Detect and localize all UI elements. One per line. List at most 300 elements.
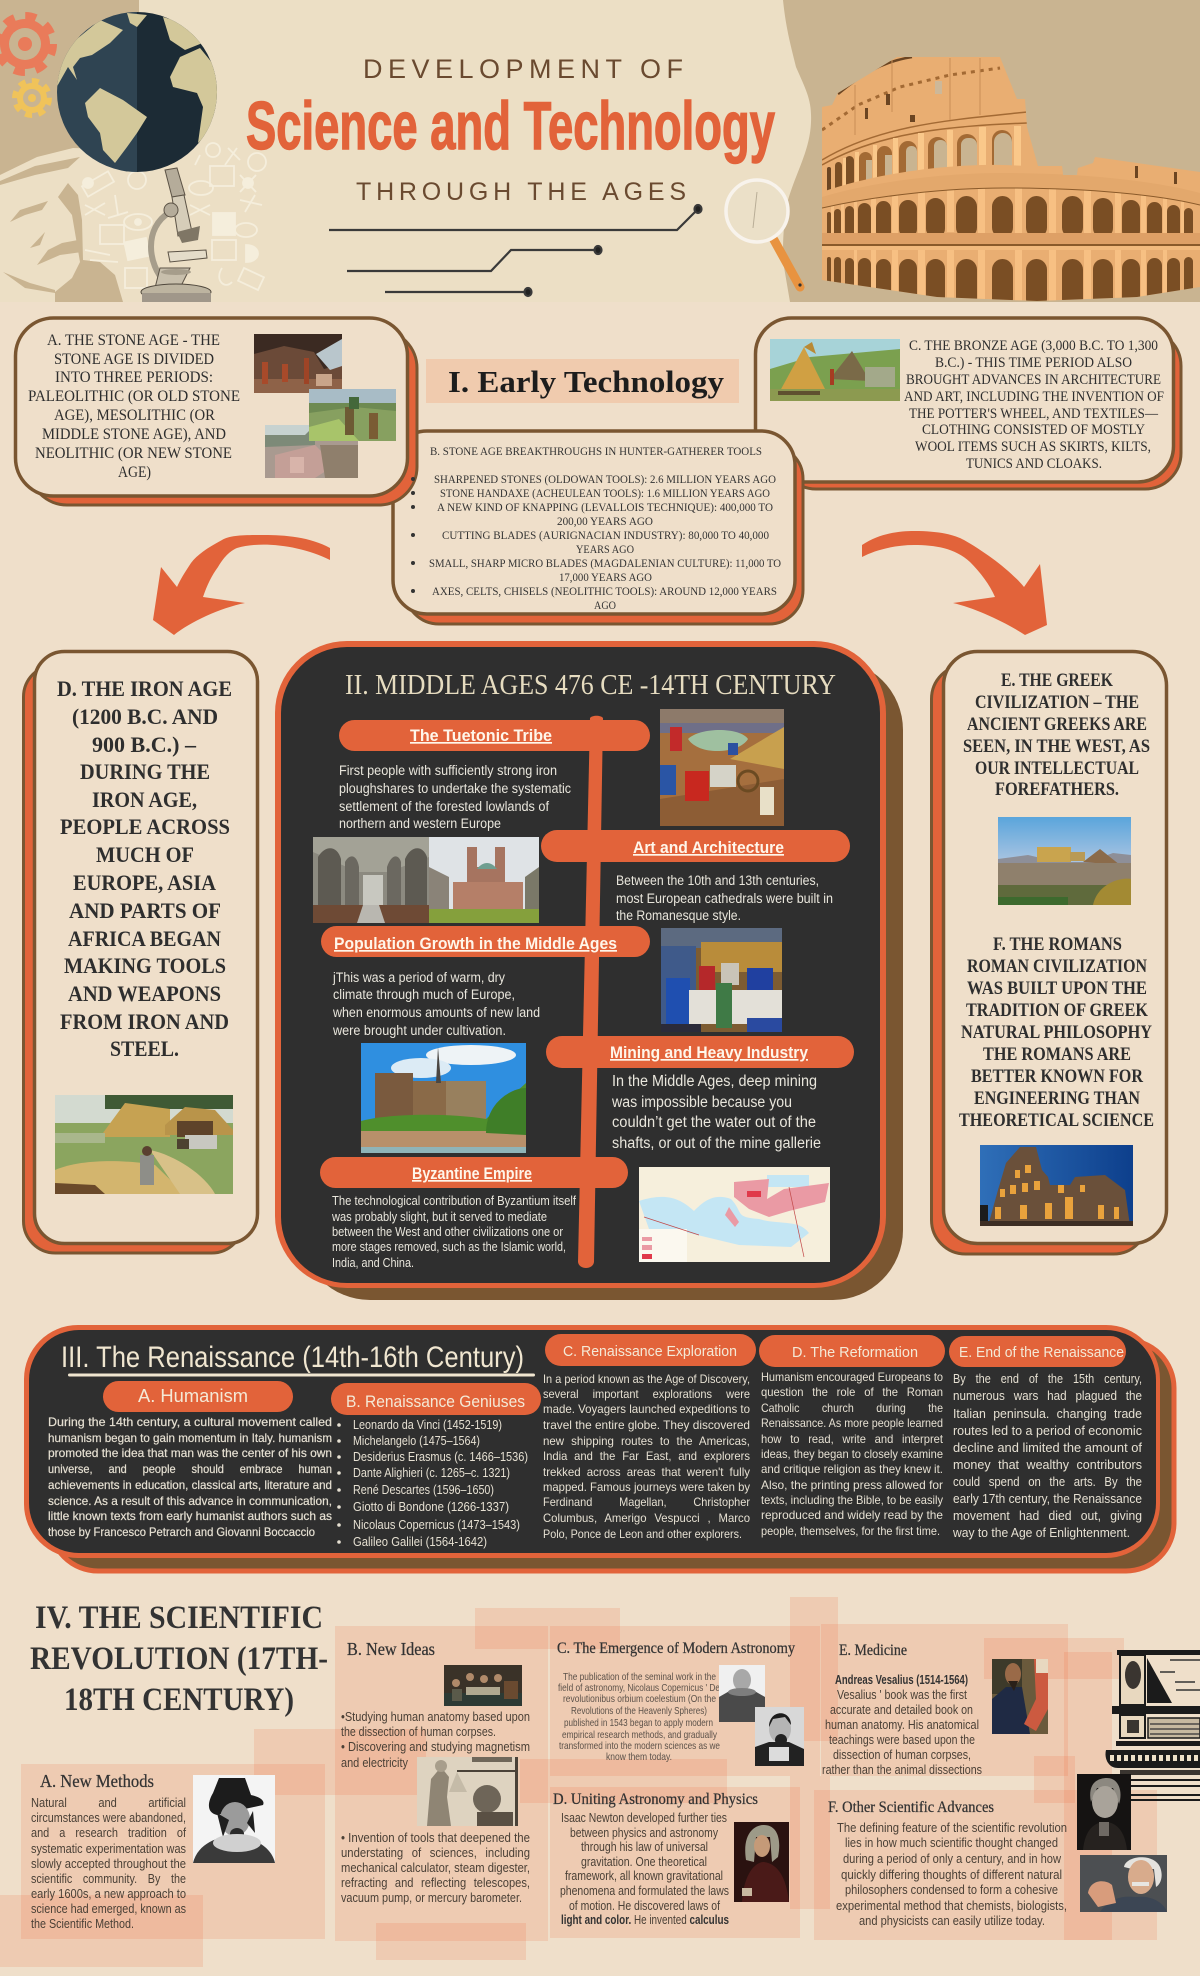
panel B text: 17,000 YEARS AGO — [559, 572, 652, 584]
panel B text: AXES, CELTS, CHISELS (NEOLITHIC TOOLS): AROUND 12,000 YEARS — [432, 586, 777, 598]
text: the reformation: Catholic church during the — [761, 1401, 943, 1415]
panel B text: CUTTING BLADES (AURIGNACIAN INDUSTRY): 80,000 TO 40,000 — [442, 530, 769, 542]
section heading: I. Early Technology — [426, 359, 739, 403]
panel B: stone age breakthroughs box — [393, 431, 803, 624]
text: modern astronomy: published in 1543 began to apply modern — [564, 1717, 713, 1729]
text: medicine: dissection of human corpses, — [833, 1748, 971, 1762]
text: end of the renaissance: decline and limited the amount of — [953, 1441, 1143, 1455]
panel D text — [57, 676, 232, 1061]
text: renaissance exploration: In a period known as the Age of Discovery, — [543, 1372, 750, 1386]
panel C text: TUNICS AND CLOAKS. — [966, 456, 1102, 472]
text: other scientific advances: and physicists can easily utilize today. — [859, 1914, 1045, 1928]
list: renaissance geniuses: Nicolaus Copernicus (1473–1543) — [353, 1518, 520, 1532]
panel F text: F. THE ROMANS — [993, 934, 1122, 955]
panel E text — [963, 670, 1150, 800]
science icons collage — [82, 143, 266, 290]
text: modern astronomy: revolutionibus orbium coelestium (On the — [563, 1693, 716, 1705]
image: iron age village — [55, 1095, 233, 1194]
image: vesalius portrait — [992, 1659, 1048, 1734]
panel F text: TRADITION OF GREEK — [966, 1000, 1148, 1021]
text: uniting astronomy: light and color. He invented calculus — [561, 1913, 729, 1927]
colosseum wall under top arches — [827, 164, 1021, 196]
title: through the ages: THROUGH THE AGES — [356, 178, 686, 206]
text: mining and heavy industry — [611, 1073, 821, 1152]
text: new ideas first bullets: •Studying human anatomy based upon — [341, 1710, 530, 1724]
panel B shadow — [405, 445, 803, 624]
globe — [55, 10, 222, 175]
pill: art and architecture: Art and Architecture — [633, 838, 784, 857]
image: cave dwellers — [254, 334, 342, 393]
pill: renaissance geniuses: B. Renaissance Geniuses — [346, 1392, 525, 1411]
text: tuetonic tribe: northern and western Europe — [339, 816, 501, 831]
panel A text — [28, 332, 240, 481]
image: bronze age village — [770, 339, 900, 401]
colosseum top pillars — [843, 126, 1021, 186]
panel C text: THE POTTER'S WHEEL, AND TEXTILES— — [909, 406, 1158, 422]
text: uniting astronomy: gravitation. One theoretical — [581, 1855, 707, 1869]
panel F text: ENGINEERING THAN — [974, 1088, 1140, 1109]
section heading: IV. The Scientific Revolution: REVOLUTION (17TH- — [30, 1641, 328, 1677]
image: acropolis — [998, 817, 1131, 905]
pill: renaissance exploration: C. Renaissance Exploration — [563, 1343, 737, 1360]
text: other scientific advances — [836, 1821, 1067, 1928]
text: byzantine empire: was probably slight, but it served to mediate — [331, 1210, 547, 1224]
panel D text: D. THE IRON AGE — [57, 676, 232, 701]
text: the reformation: Also, the printing press allowed for — [761, 1478, 943, 1492]
text: population growth: jThis was a period of warm, dry — [332, 970, 505, 985]
text: renaissance exploration: Ferdinand Magellan, Christopher — [543, 1495, 750, 1509]
image: medieval farmers — [660, 709, 784, 826]
panel D: iron age — [24, 652, 258, 1253]
panel A body — [16, 318, 408, 496]
block A: new methods — [31, 1771, 275, 1931]
text: renaissance exploration: mapped. Famous journeys were taken by — [543, 1480, 750, 1494]
text: population growth: were brought under cultivation. — [332, 1023, 506, 1038]
panel A text: A. THE STONE AGE - THE — [47, 332, 220, 349]
text: new ideas invention bullet: • Invention of tools that deepened the — [341, 1831, 530, 1845]
text: byzantine empire: India, and China. — [332, 1256, 414, 1270]
heading: new methods: A. New Methods — [40, 1771, 154, 1791]
text: uniting astronomy: through his law of universal — [581, 1840, 708, 1854]
text: the reformation: Humanism encouraged Europeans to — [761, 1370, 943, 1384]
panel C text: CLOTHING CONSISTED OF MOSTLY — [922, 422, 1145, 438]
text: tuetonic tribe: First people with sufficiently strong iron — [339, 763, 557, 778]
text: tuetonic tribe: ploughshares to undertake the systematic — [339, 781, 571, 796]
text: humanism — [48, 1415, 332, 1539]
text: new methods: slowly accepted throughout the — [31, 1857, 186, 1871]
text: modern astronomy — [558, 1671, 720, 1763]
text: uniting astronomy: of motion. He discovered laws of — [569, 1899, 720, 1913]
panel F text: NATURAL PHILOSOPHY — [961, 1022, 1152, 1043]
text: new ideas first bullets: and electricity — [341, 1756, 409, 1770]
text: end of the renaissance: way to the Age of Enlightenment. — [952, 1526, 1130, 1540]
left tan shape — [0, 0, 139, 175]
pill: the reformation: D. The Reformation — [792, 1344, 918, 1361]
text: new ideas invention bullet: mechanical calculator, steam digester, — [341, 1861, 530, 1875]
text: humanism: promoted the idea that man was the center of his own — [48, 1446, 332, 1460]
panel C shadow — [780, 330, 1181, 489]
colosseum illustration — [815, 50, 1200, 310]
pill: the tuetonic tribe — [339, 720, 650, 751]
heading: medicine: E. Medicine — [839, 1642, 907, 1659]
image: neolithic settlers — [265, 425, 358, 478]
text: new methods: circumstances were abandoned, — [31, 1811, 186, 1825]
panel A text: PALEOLITHIC (OR OLD STONE — [28, 388, 240, 405]
text: medicine: Andreas Vesalius (1514-1564) — [835, 1673, 968, 1687]
heading: modern astronomy: C. The Emergence of Modern Astronomy — [557, 1640, 795, 1657]
heading: new ideas: B. New Ideas — [347, 1639, 435, 1659]
text: population growth: climate through much of Europe, — [333, 987, 515, 1002]
panel F text — [959, 934, 1154, 1131]
panel E text: CIVILIZATION – THE — [975, 692, 1139, 713]
panel C body — [756, 318, 1174, 482]
text: byzantine empire: more stages removed, such as the Islamic world, — [332, 1240, 566, 1254]
pill: renaissance exploration — [545, 1334, 756, 1366]
block B: new ideas — [341, 1639, 530, 1905]
colosseum top arches — [827, 130, 1012, 190]
text: end of the renaissance: could spend on the arts. By the — [953, 1475, 1142, 1489]
panel B text — [411, 446, 781, 612]
text: renaissance exploration: trekked across areas that weren't fully — [543, 1465, 750, 1479]
text: end of the renaissance: routes led to a period of economic — [953, 1424, 1142, 1438]
block D: uniting astronomy and physics — [553, 1791, 789, 1927]
panel B text: A NEW KIND OF KNAPPING (LEVALLOIS TECHNIQUE): 400,000 TO — [437, 502, 773, 514]
panel A text: NEOLITHIC (OR NEW STONE — [35, 445, 232, 462]
text: tuetonic tribe: settlement of the forested lowlands of — [339, 799, 549, 814]
image: gothic cathedral interior — [313, 837, 429, 923]
text: renaissance exploration: travel the entire globe. They discovered — [543, 1418, 750, 1432]
panel E/F body — [944, 652, 1166, 1244]
image: kepler portrait — [755, 1707, 804, 1766]
text: the reformation — [761, 1370, 944, 1538]
panel E text: FOREFATHERS. — [995, 779, 1119, 800]
panel III body — [29, 1330, 1156, 1553]
text: new methods: science had emerged, known as — [31, 1902, 186, 1916]
panel A shadow — [29, 330, 417, 505]
panel F text: THE ROMANS ARE — [983, 1044, 1131, 1065]
text: end of the renaissance: movement had died out, giving — [953, 1509, 1142, 1523]
colosseum lower cornice — [815, 233, 1200, 244]
pill: renaissance geniuses — [331, 1383, 541, 1415]
text: new ideas first bullets: the dissection of human corpses. — [341, 1725, 496, 1739]
panel D text: EUROPE, ASIA — [73, 870, 216, 895]
panel D text: (1200 B.C. AND — [72, 704, 218, 729]
colosseum middle pillars — [831, 188, 1184, 233]
heading: uniting astronomy: D. Uniting Astronomy and Physics — [553, 1791, 758, 1808]
text: end of the renaissance: By the end of the 15th century, — [953, 1372, 1142, 1386]
panel D text: AND WEAPONS — [68, 981, 221, 1006]
right tan wave — [783, 0, 1200, 302]
block C: emergence of modern astronomy — [557, 1640, 804, 1766]
text: end of the renaissance: numerous wars had plagued the — [953, 1389, 1142, 1403]
text: medicine: rather than the animal dissections — [822, 1763, 982, 1777]
translucent panels of section IV — [0, 1597, 1157, 1967]
image: medieval banquet — [661, 928, 782, 1032]
list: renaissance geniuses: Dante Alighieri (c. 1265–c. 1321) — [353, 1466, 510, 1480]
panel B text: 200,00 YEARS AGO — [557, 516, 653, 528]
text: medicine: human anatomy. His anatomical — [825, 1718, 979, 1732]
image: anatomy lesson — [444, 1665, 522, 1706]
text: uniting astronomy — [560, 1811, 729, 1927]
colosseum upper ring details — [822, 57, 1027, 165]
text: uniting astronomy: between physics and astronomy — [570, 1826, 719, 1840]
text: renaissance exploration: Polo, Ponce de Leon and other explorers. — [543, 1527, 742, 1541]
text: humanism: those by Francesco Petrarch and Giovanni Boccaccio — [48, 1525, 315, 1539]
section heading: IV. The Scientific Revolution — [30, 1600, 328, 1718]
text: modern astronomy: The publication of the seminal work in the — [563, 1671, 716, 1683]
image: tycho brahe portrait — [719, 1665, 765, 1722]
yellow gear — [15, 81, 49, 115]
image: romanesque cathedral — [429, 837, 539, 923]
text: modern astronomy: field of astronomy, Nicolaus Copernicus ' De — [558, 1682, 720, 1694]
pill: the tuetonic tribe: The Tuetonic Tribe — [410, 726, 552, 745]
pill: byzantine empire — [320, 1157, 628, 1188]
panel D text: 900 B.C.) – — [92, 732, 197, 757]
heading: other scientific advances: F. Other Scientific Advances — [828, 1799, 994, 1816]
colosseum mid ring — [831, 188, 1184, 206]
panel B text: SMALL, SHARP MICRO BLADES (MAGDALENIAN CULTURE): 11,000 TO — [429, 558, 781, 570]
section heading: I. Early Technology: I. Early Technology — [448, 364, 725, 399]
panel III shadow — [50, 1340, 1174, 1571]
text: art and architecture: Between the 10th and 13th centuries, — [616, 873, 819, 888]
panel C text: WOOL ITEMS SUCH AS SKIRTS, KILTS, — [915, 439, 1151, 455]
image: experiment engraving — [417, 1757, 518, 1826]
title: development of: DEVELOPMENT OF — [363, 54, 683, 84]
arrow: left curved — [153, 535, 330, 635]
text: art and architecture: most European cathedrals were built in — [616, 891, 833, 906]
list: renaissance geniuses — [337, 1418, 528, 1549]
image: isaac newton portrait — [734, 1822, 789, 1902]
connector lines — [329, 205, 702, 296]
text: new methods — [31, 1796, 186, 1931]
text: end of the renaissance: early 17th century, the Renaissance — [953, 1492, 1142, 1506]
pill: end of the renaissance — [949, 1336, 1126, 1367]
panel B text: SHARPENED STONES (OLDOWAN TOOLS): 2.6 MILLION YEARS AGO — [434, 474, 776, 486]
list: renaissance geniuses: Galileo Galilei (1564-1642) — [353, 1535, 487, 1549]
text: population growth — [332, 970, 540, 1038]
list: renaissance geniuses: Leonardo da Vinci (1452-1519) — [353, 1418, 502, 1432]
panel II border — [275, 641, 886, 1288]
text: renaissance exploration: Columbus, Amerigo Vespucci , Marco — [543, 1511, 750, 1525]
pill: humanism — [103, 1381, 293, 1412]
panel II: middle ages — [275, 641, 903, 1300]
pill: mining and heavy industry — [546, 1036, 854, 1068]
text: the reformation: how to read, write and interpret — [761, 1432, 944, 1446]
text: medicine: teachings were based upon the — [829, 1733, 975, 1747]
panel C text: AND ART, INCLUDING THE INVENTION OF — [904, 389, 1164, 405]
engraving: classical column capital — [1106, 1650, 1200, 1800]
panel F text: WAS BUILT UPON THE — [967, 978, 1147, 999]
text: other scientific advances: during a period of only a century, and in how — [843, 1852, 1062, 1866]
panel C text — [904, 338, 1164, 472]
panel D text: AND PARTS OF — [69, 898, 221, 923]
text: other scientific advances: experimental method that chemists, biologists, — [836, 1899, 1067, 1913]
panel A text: AGE), MESOLITHIC (OR — [54, 407, 216, 424]
pill: population growth — [321, 926, 650, 957]
text: byzantine empire — [331, 1194, 576, 1270]
text: new ideas first bullets — [341, 1710, 530, 1770]
text: new ideas invention bullet: understating of sciences, including — [341, 1846, 530, 1860]
silhouette of thinker head — [0, 157, 123, 302]
text: end of the renaissance: money that wealthy contributors — [953, 1458, 1142, 1472]
text: the reformation: texts, including the Bible, to be easily — [761, 1493, 943, 1507]
panel D shadow — [24, 665, 244, 1253]
text: new ideas invention bullet: refracting and reflecting telescopes, — [341, 1876, 530, 1890]
text: art and architecture — [616, 873, 833, 923]
heading underline — [68, 1374, 535, 1376]
text: new methods: scientific community. By the — [31, 1872, 186, 1886]
text: the reformation: ideas, they began to closely examine — [761, 1447, 943, 1461]
section heading: IV. The Scientific Revolution: 18TH CENTURY) — [64, 1682, 294, 1718]
text: mining and heavy industry: In the Middle Ages, deep mining — [612, 1073, 817, 1090]
text: other scientific advances: quickly differing thoughts of different natural — [841, 1868, 1062, 1882]
text: new ideas invention bullet: vacuum pump, or mercury barometer. — [341, 1891, 522, 1905]
text: new methods: Natural and artificial — [31, 1796, 186, 1810]
text: uniting astronomy: framework, all known gravitational — [565, 1869, 723, 1883]
panel D text: STEEL. — [110, 1036, 179, 1061]
text: new ideas invention bullet — [341, 1831, 530, 1905]
block E: medicine — [822, 1642, 1048, 1777]
panel E/F shadow — [932, 665, 1148, 1254]
text: renaissance exploration: several important explorations were — [543, 1387, 750, 1401]
panel E/F: greek and roman civilization — [932, 652, 1166, 1254]
text: renaissance exploration: India and the Far East, and explorers — [543, 1449, 750, 1463]
list: renaissance geniuses: Michelangelo (1475–1564) — [353, 1434, 480, 1448]
list bullets — [337, 1423, 341, 1544]
image: albert einstein portrait — [1080, 1855, 1167, 1912]
text: mining and heavy industry: shafts, or out of the mine gallerie — [612, 1135, 821, 1152]
colosseum bottom arches — [827, 257, 1193, 301]
image: notre dame — [361, 1043, 526, 1153]
map: byzantine empire — [639, 1167, 830, 1262]
text: other scientific advances: philosophers condensed to form a cohesive — [845, 1883, 1058, 1897]
panel D text: MAKING TOOLS — [64, 953, 226, 978]
text: other scientific advances: The defining feature of the scientific revolution — [837, 1821, 1067, 1835]
panel II body — [281, 647, 880, 1283]
text: modern astronomy: empirical research methods, and gradually — [562, 1729, 718, 1741]
panel III border — [24, 1325, 1160, 1558]
orange gear — [0, 16, 53, 72]
list: renaissance geniuses: René Descartes (1596–1650) — [353, 1483, 494, 1497]
panel A: stone age — [16, 318, 417, 505]
panel C: bronze age — [756, 318, 1181, 489]
text: population growth: when enormous amounts of new land — [332, 1005, 540, 1020]
text: renaissance exploration — [543, 1372, 750, 1541]
header background — [0, 0, 1200, 302]
panel D text: MUCH OF — [96, 842, 194, 867]
text: medicine: accurate and detailed book on — [830, 1703, 973, 1717]
text: new methods: the Scientific Method. — [31, 1917, 134, 1931]
panel E text: SEEN, IN THE WEST, AS — [963, 736, 1150, 757]
panel B text: B. STONE AGE BREAKTHROUGHS IN HUNTER-GATHERER TOOLS — [430, 446, 762, 458]
text: the reformation: and critique religion as they knew it. — [761, 1462, 943, 1476]
panel III heading: III. The Renaissance (14th-16th Century) — [61, 1341, 524, 1374]
title: science and technology: Science and Technology — [246, 88, 775, 164]
text: the reformation: question the role of the Roman — [761, 1385, 943, 1399]
header banner — [0, 0, 1200, 310]
panel F text: BETTER KNOWN FOR — [971, 1066, 1143, 1087]
image: colosseum at dusk — [980, 1145, 1133, 1226]
panel B text: AGO — [594, 600, 616, 612]
panel A text: MIDDLE STONE AGE), AND — [42, 426, 226, 443]
panel D text: FROM IRON AND — [60, 1009, 229, 1034]
text: medicine — [822, 1673, 982, 1777]
pill: end of the renaissance: E. End of the Renaissance — [959, 1344, 1124, 1361]
panel C text: BROUGHT ADVANCES IN ARCHITECTURE — [906, 372, 1161, 388]
text: modern astronomy: know them today. — [606, 1751, 672, 1763]
panel A text: INTO THREE PERIODS: — [55, 369, 213, 386]
text: new ideas first bullets: • Discovering and studying magnetism — [341, 1740, 530, 1754]
text: mining and heavy industry: couldn’t get the water out of the — [612, 1114, 816, 1131]
panel B text: YEARS AGO — [576, 544, 634, 556]
text: humanism: science. As a result of this advance in communication, — [48, 1494, 332, 1508]
text: new methods: early 1600s, a new approach to — [31, 1887, 186, 1901]
panel D text: PEOPLE ACROSS — [60, 814, 230, 839]
text: art and architecture: the Romanesque style. — [616, 908, 741, 923]
panel E text: E. THE GREEK — [1001, 670, 1113, 691]
panel A text: AGE) — [118, 464, 151, 481]
panel B bullets — [411, 477, 415, 593]
text: humanism: achievements in education, classical arts, literature and — [48, 1478, 332, 1492]
panel III: the renaissance — [24, 1325, 1174, 1571]
text: modern astronomy: transformed into the modern sciences as we — [559, 1740, 720, 1752]
image: marie curie portrait — [1077, 1774, 1131, 1850]
text: end of the renaissance: Italian peninsula. changing trade — [953, 1407, 1142, 1421]
microscope — [141, 168, 211, 302]
text: uniting astronomy: phenomena and formulated the laws — [560, 1884, 729, 1898]
pill: the reformation — [759, 1335, 945, 1367]
pill: art and architecture — [541, 830, 850, 862]
text: renaissance exploration: made. Voyagers launched expeditions to — [543, 1402, 750, 1416]
panel E text: OUR INTELLECTUAL — [975, 758, 1139, 779]
panel F text: THEORETICAL SCIENCE — [959, 1110, 1154, 1131]
text: byzantine empire: between the West and other civilizations one or — [332, 1225, 563, 1239]
arrow: right curved — [862, 531, 1047, 635]
section heading: IV. The Scientific Revolution: IV. THE SCIENTIFIC — [35, 1600, 323, 1636]
list: renaissance geniuses: Desiderius Erasmus (c. 1466–1536) — [353, 1450, 528, 1464]
text: uniting astronomy: Isaac Newton developed further ties — [561, 1811, 727, 1825]
text: the reformation: reproduced and widely read by the — [761, 1508, 943, 1522]
text: the reformation: Renaissance. As more people learned — [761, 1416, 943, 1430]
timeline spine — [578, 716, 603, 1268]
panel D body — [34, 652, 258, 1244]
panel II shadow — [300, 660, 903, 1300]
list: renaissance geniuses: Giotto di Bondone (1266-1337) — [353, 1500, 509, 1514]
text: end of the renaissance — [952, 1372, 1143, 1540]
panel D text: DURING THE — [80, 759, 210, 784]
image: francis bacon portrait — [193, 1775, 275, 1863]
text: humanism: little known texts from early humanist authors such as — [48, 1509, 332, 1523]
panel B text: STONE HANDAXE (ACHEULEAN TOOLS): 1.6 MILLION YEARS AGO — [440, 488, 770, 500]
image: hunters in landscape — [309, 389, 396, 441]
panel B body — [393, 431, 795, 614]
colosseum bottom pillars — [854, 250, 1167, 305]
text: medicine: Vesalius ' book was the first — [837, 1688, 967, 1702]
text: tuetonic tribe — [339, 763, 571, 831]
colosseum middle arches — [827, 196, 1193, 233]
pill: humanism: A. Humanism — [138, 1386, 248, 1406]
block F: other scientific advances — [828, 1799, 1067, 1928]
text: humanism: During the 14th century, a cultural movement called — [48, 1415, 332, 1429]
text: humanism: universe, and people should embrace human — [48, 1462, 332, 1476]
text: new methods: systematic experimentation was — [31, 1842, 186, 1856]
pill: mining and heavy industry: Mining and Heavy Industry — [610, 1043, 808, 1062]
text: new methods: and a research tradition of — [31, 1826, 186, 1840]
pill: population growth: Population Growth in the Middle Ages — [334, 934, 617, 953]
panel E text: ANCIENT GREEKS ARE — [967, 714, 1147, 735]
pill: byzantine empire: Byzantine Empire — [412, 1164, 532, 1183]
text: other scientific advances: lies in how much scientific thought changed — [845, 1836, 1058, 1850]
